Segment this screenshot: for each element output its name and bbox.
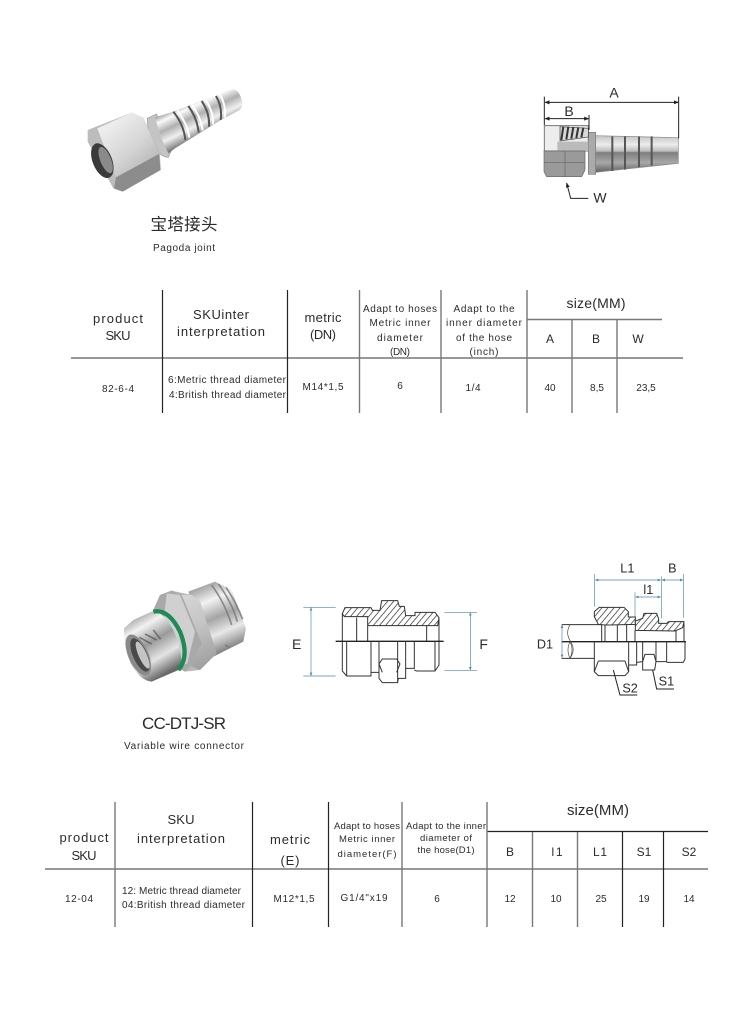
header: SKU interpretation	[137, 812, 225, 846]
callout S1: S1	[659, 675, 674, 689]
dimension F	[444, 612, 488, 670]
dimension drawing: section L1, l1, B, D1, S1, S2	[537, 561, 686, 695]
data row: 6	[397, 381, 403, 392]
header: product SKU	[60, 830, 109, 863]
header: size columns: B	[592, 332, 600, 346]
header: metric: (E)	[280, 853, 300, 868]
header: inch inner diameter: the hose(D1)	[418, 845, 474, 856]
dimension B: B	[564, 103, 574, 119]
header: product SKU: SKU	[72, 848, 96, 863]
header: size columns	[506, 845, 697, 859]
header: SKU interpretation: SKU	[168, 812, 194, 827]
data row: 12	[504, 894, 516, 905]
data row: 12: Metric thread diameter	[122, 886, 242, 897]
header: size columns: A	[546, 332, 554, 346]
header: SKU interpretation	[177, 307, 265, 339]
header: metric: metric	[304, 310, 342, 325]
header: size columns: l1	[552, 845, 563, 859]
dimension L1	[595, 561, 661, 618]
data row	[102, 375, 656, 401]
data row: G1/4"x19	[340, 893, 388, 904]
header: metric	[304, 310, 342, 342]
data row: 40	[544, 383, 556, 394]
dimension B: B	[668, 561, 677, 575]
dimension W: W	[593, 189, 607, 205]
header: product SKU	[93, 311, 143, 343]
data row: 82-6-4	[102, 384, 134, 395]
dimension D1	[537, 625, 562, 658]
dimension E	[292, 607, 336, 676]
header: size group: size(MM)	[566, 295, 626, 311]
header: inch inner diameter: inner diameter	[446, 318, 523, 329]
header: size columns: S1	[637, 845, 652, 859]
callout S2: S2	[622, 681, 638, 695]
header: size columns: S2	[682, 845, 697, 859]
dimension L1: L1	[620, 561, 634, 575]
header: metric inner diameter: diameter(F)	[338, 849, 396, 860]
header: metric inner diameter	[334, 821, 400, 860]
dimension drawing: section E and F	[292, 601, 488, 683]
dimension drawing: pagoda joint	[544, 84, 679, 205]
header: inch inner diameter	[446, 304, 523, 358]
header: product SKU: SKU	[106, 328, 130, 343]
callout S1	[653, 670, 674, 689]
header: inch inner diameter: Adapt to the inner	[406, 821, 486, 832]
table: connector specs	[45, 802, 708, 927]
header: product SKU: product	[60, 830, 109, 845]
header: metric inner diameter: diameter	[377, 333, 424, 344]
header: SKU interpretation: interpretation	[137, 831, 225, 846]
product name: English: Pagoda joint	[153, 243, 215, 254]
dimension B	[662, 561, 684, 618]
data row: 8,5	[590, 383, 604, 394]
header: metric: metric	[270, 832, 310, 847]
data row: 6	[434, 894, 440, 905]
dimension F: F	[479, 636, 488, 652]
data row: M12*1,5	[274, 894, 315, 905]
header: inch inner diameter	[406, 821, 486, 856]
dimension l1	[635, 583, 661, 617]
dimension D1: D1	[537, 637, 553, 651]
product name: Chinese: 宝塔接头	[150, 215, 218, 234]
data row: 19	[638, 894, 650, 905]
data row: 1/4	[466, 383, 481, 394]
header: metric inner diameter: Metric inner	[339, 834, 395, 845]
dimension A: A	[609, 84, 619, 100]
header: product SKU: product	[93, 311, 143, 326]
header: inch inner diameter: (inch)	[470, 347, 498, 358]
header: inch inner diameter: Adapt to the	[454, 304, 515, 315]
header: size group: size(MM)	[567, 802, 629, 819]
data row: 10	[550, 894, 562, 905]
data row: 6:Metric thread diameter	[168, 375, 287, 386]
header: inch inner diameter: diameter of	[420, 833, 472, 844]
header: metric inner diameter	[363, 304, 437, 358]
dimension E: E	[292, 636, 301, 652]
product photo: pagoda joint	[87, 90, 242, 192]
product photo: variable wire connector	[120, 582, 246, 682]
data row: 04:British thread diameter	[122, 900, 246, 911]
header: size columns: W	[632, 332, 644, 346]
data row	[65, 886, 695, 911]
header: metric inner diameter: Metric inner	[370, 318, 431, 329]
product name: English description: Variable wire connector	[124, 741, 245, 752]
header: SKU interpretation: SKUinter	[193, 307, 250, 322]
data row: 25	[595, 894, 607, 905]
header: metric	[270, 832, 310, 868]
header: inch inner diameter: of the hose	[456, 333, 512, 344]
header: metric inner diameter: Adapt to hoses	[363, 304, 437, 315]
data row: M14*1,5	[302, 382, 344, 393]
data row: 14	[683, 894, 695, 905]
header: metric inner diameter: Adapt to hoses	[334, 821, 400, 832]
data row: 23,5	[636, 383, 656, 394]
header: SKU interpretation: interpretation	[177, 324, 265, 339]
header: metric inner diameter: (DN)	[390, 347, 410, 358]
data row: 12-04	[65, 894, 93, 905]
header: size columns: B	[506, 845, 514, 859]
data row: 4:British thread diameter	[169, 390, 287, 401]
header: size columns: L1	[593, 845, 607, 859]
product name: model: CC-DTJ-SR	[142, 714, 226, 733]
dimension l1: l1	[643, 583, 653, 597]
header: metric: (DN)	[310, 327, 336, 342]
callout S2	[613, 670, 638, 695]
table: pagoda joint specs	[71, 290, 683, 413]
header: size columns	[546, 332, 644, 346]
